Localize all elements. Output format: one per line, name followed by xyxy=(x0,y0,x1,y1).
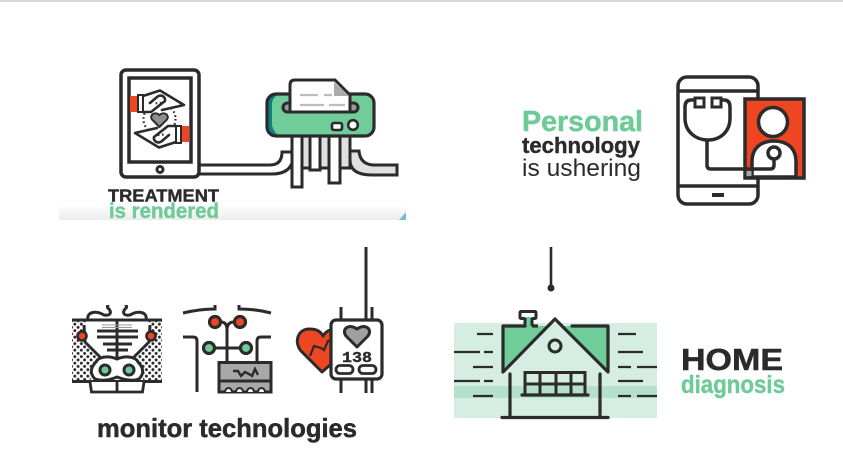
connecting pipe right xyxy=(350,151,397,175)
text: is ushering: is ushering xyxy=(522,155,641,182)
icon: electrodes and monitor xyxy=(183,305,271,392)
doctor portrait xyxy=(745,99,804,178)
subheading: is rendered: is rendered xyxy=(109,200,219,223)
icon: phone with stethoscope and doctor xyxy=(678,77,804,204)
wind dashes xyxy=(454,334,657,396)
heading: treatment: TREATMENT xyxy=(108,186,219,206)
icon: heart monitor xyxy=(297,247,382,393)
panel: monitor technologies xyxy=(72,247,382,443)
reading: 138: 138 xyxy=(342,350,372,367)
heading: Personal: Personal xyxy=(522,106,643,138)
heading: HOME: HOME xyxy=(681,342,783,377)
icon: tablet with caring hands xyxy=(121,70,199,177)
caption: monitor technologies: monitor technologies xyxy=(97,413,357,443)
text: technology: technology xyxy=(522,133,640,158)
icon: heart xyxy=(151,113,168,127)
background panel xyxy=(454,323,657,418)
panel: home diagnosis xyxy=(454,247,785,418)
connecting pipe left xyxy=(199,152,293,174)
pin line xyxy=(550,247,552,288)
icon: upper hand xyxy=(130,90,184,112)
icon: shredder xyxy=(267,80,374,187)
subheading: diagnosis: diagnosis xyxy=(681,371,785,399)
icon: skeleton x-ray xyxy=(72,305,162,392)
stethoscope xyxy=(685,100,730,140)
icon: lower hand xyxy=(135,126,189,148)
panel: personal technology xyxy=(522,77,804,204)
panel: treatment xyxy=(59,70,406,223)
icon: house xyxy=(502,312,608,418)
